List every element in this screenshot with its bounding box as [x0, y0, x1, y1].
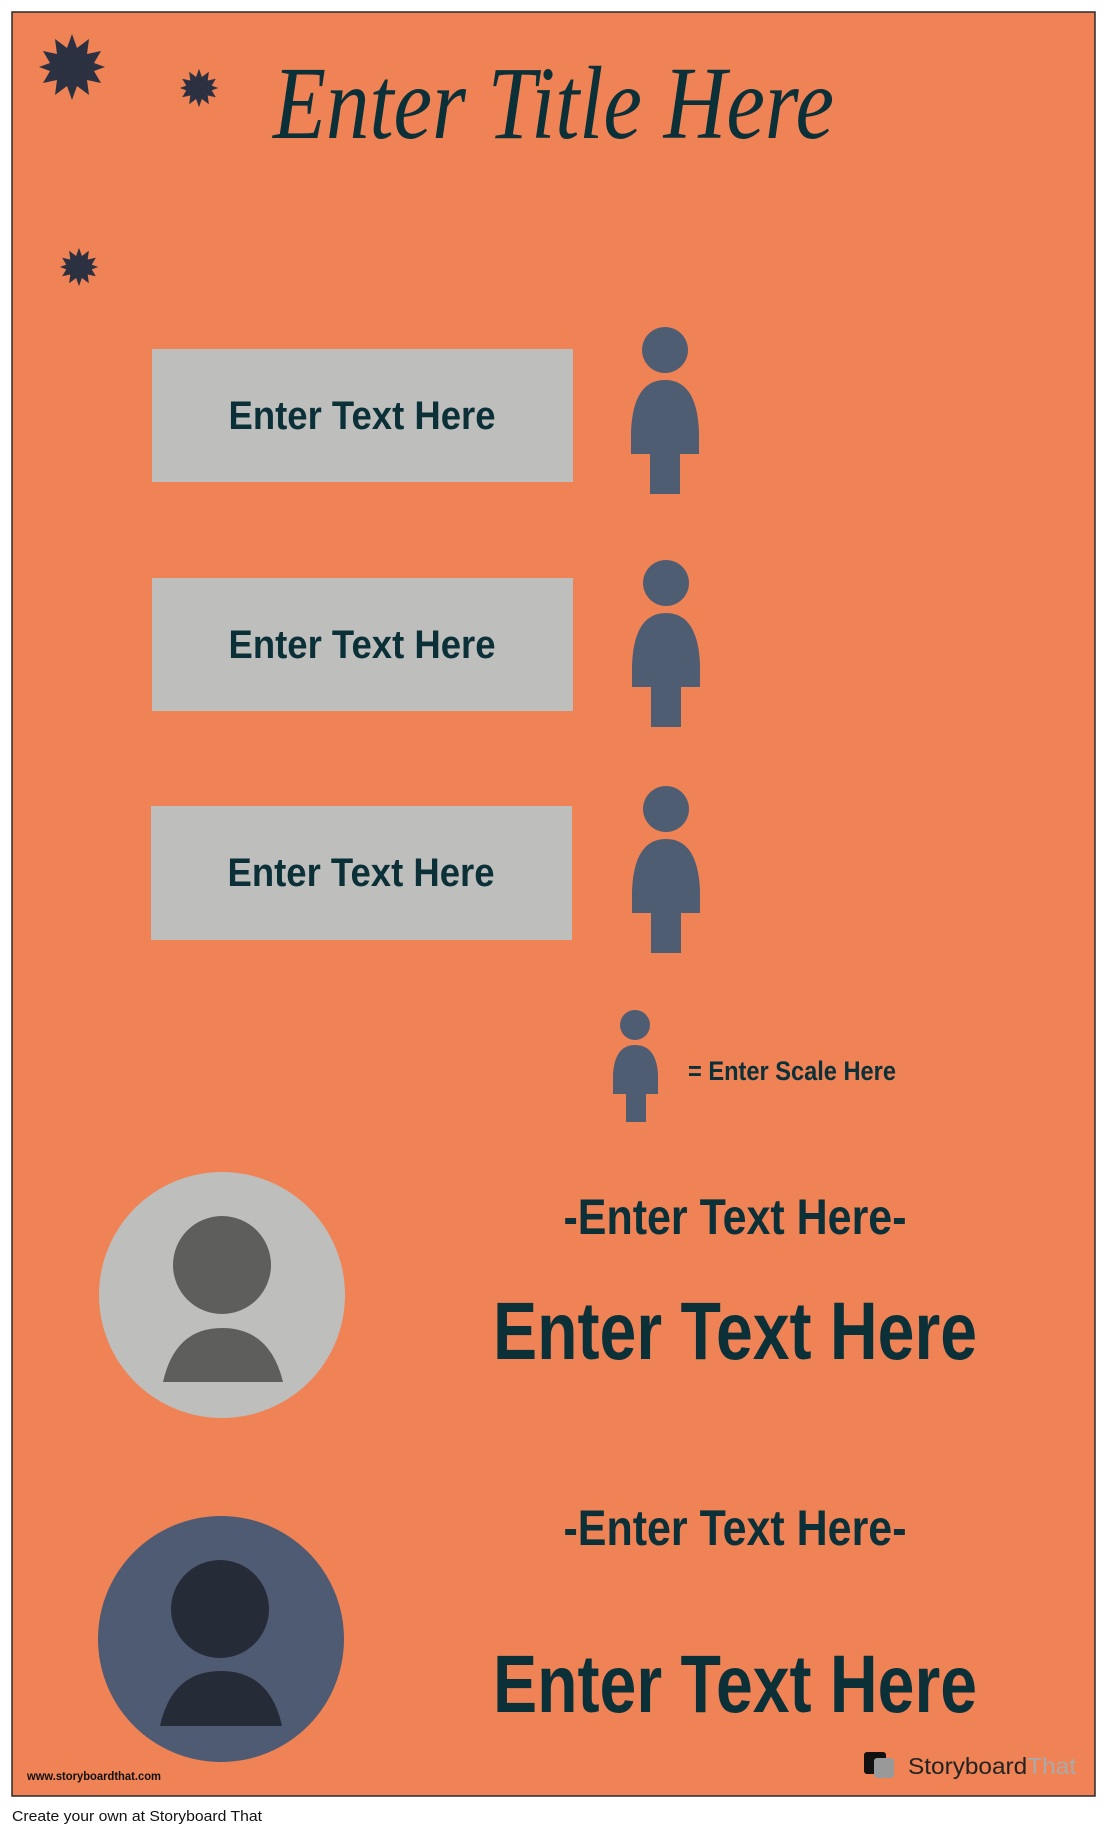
panel: text box 1: Enter Text Here — [228, 394, 496, 438]
icon: star burst large — [39, 34, 105, 100]
panel: text box 2: Enter Text Here — [228, 623, 496, 667]
icon: star burst left — [60, 248, 98, 286]
icon: person 2 — [632, 560, 700, 727]
scale label: = Enter Scale Here — [688, 1056, 896, 1086]
big text 2: Enter Text Here — [493, 1639, 977, 1730]
panel: text box 3: Enter Text Here — [228, 851, 494, 895]
icon: star burst small — [180, 69, 218, 107]
icon: avatar dark — [98, 1516, 344, 1762]
logo: Storyboard That — [908, 1753, 1077, 1779]
credit: Create your own at Storyboard That — [12, 1808, 263, 1825]
icon: person 1 — [631, 327, 699, 494]
panel: text box 3 — [151, 806, 572, 940]
subheading 1: -Enter Text Here- — [564, 1189, 906, 1245]
title: Enter Title Here — [271, 46, 834, 161]
big text 1: Enter Text Here — [493, 1286, 977, 1377]
icon: scale person — [613, 1010, 658, 1122]
icon: avatar light — [99, 1172, 345, 1418]
subheading 2: -Enter Text Here- — [564, 1500, 906, 1556]
panel: text box 2 — [152, 578, 573, 711]
icon: person 3 — [632, 786, 700, 953]
panel: text box 1 — [152, 349, 573, 482]
footer url: www.storyboardthat.com — [26, 1769, 161, 1783]
